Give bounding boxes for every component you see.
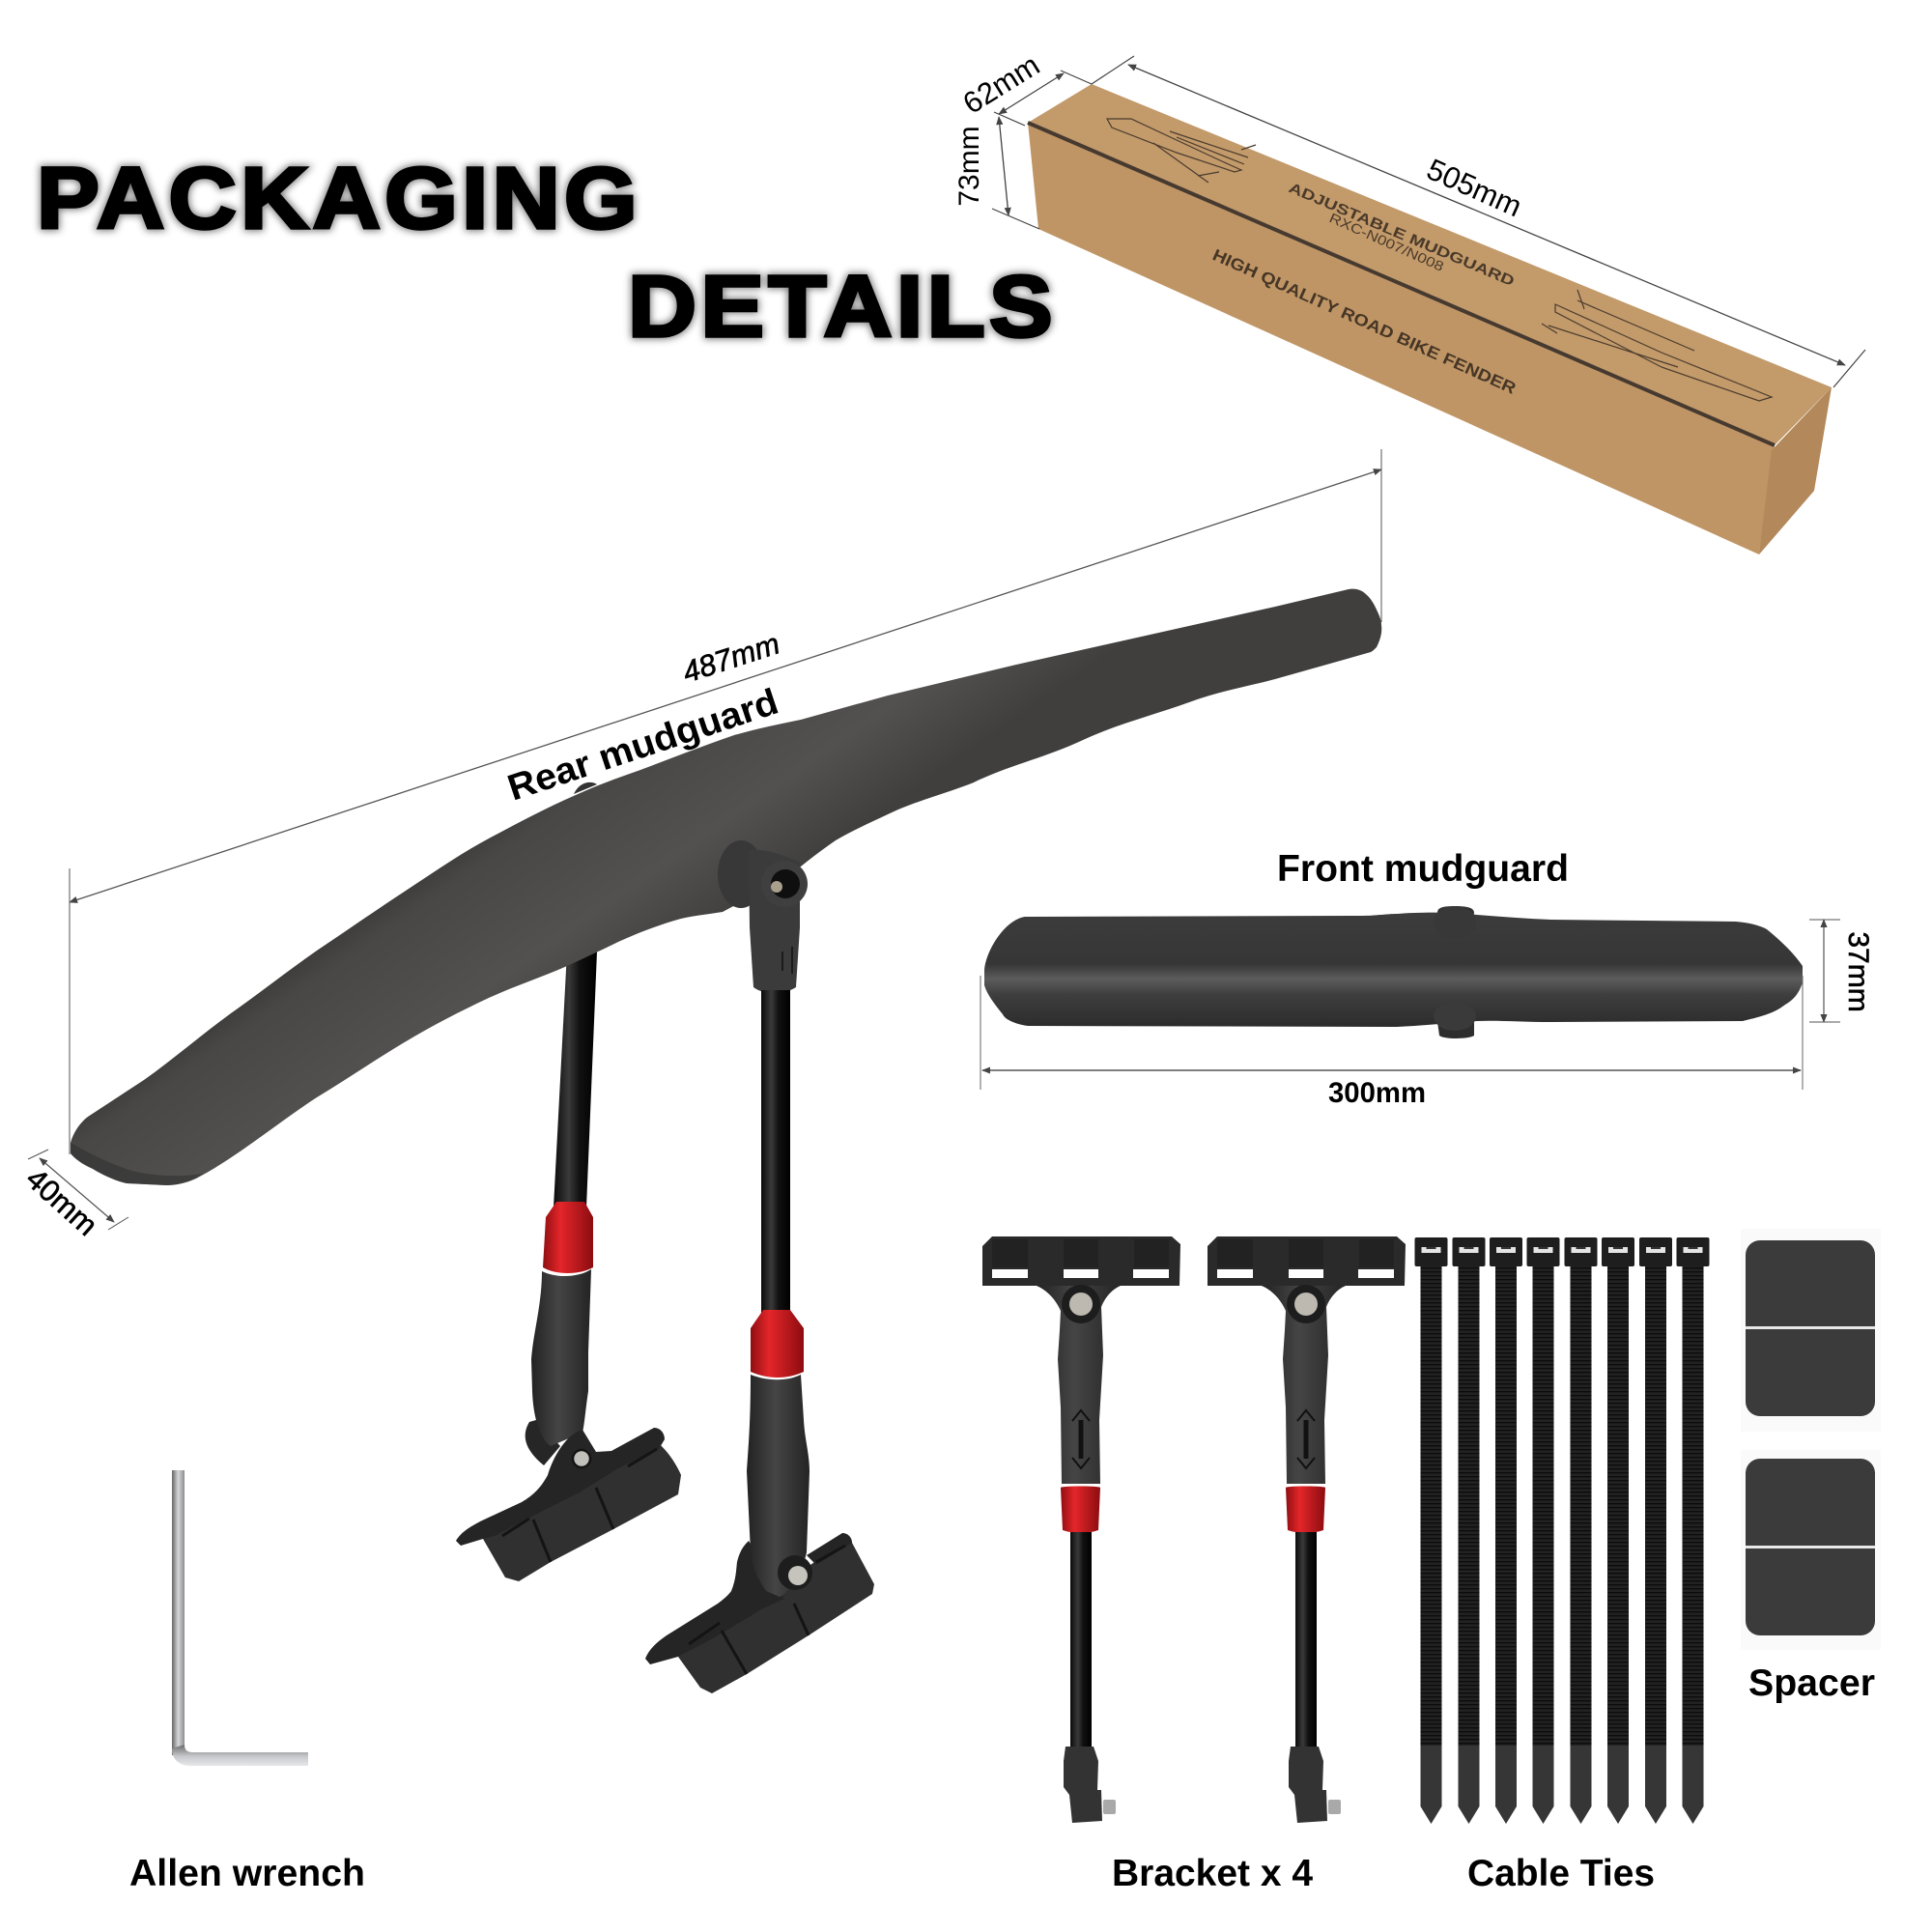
rear strut A lower assembly xyxy=(456,1202,681,1581)
title: PACKAGING: PACKAGING xyxy=(37,151,641,247)
strut B red collar xyxy=(751,1310,804,1378)
strut A foot rollers xyxy=(480,1439,681,1581)
bracket 1 xyxy=(982,1236,1180,1823)
box: sketch of mudguard right xyxy=(1542,290,1772,401)
box: front face xyxy=(1028,123,1775,554)
rear strut B assembly xyxy=(645,990,874,1693)
box text: adjustable mudguard: ADJUSTABLE MUDGUARD xyxy=(1286,180,1517,290)
strut A hub xyxy=(526,1420,560,1465)
dimension: rear width 40mm xyxy=(19,1150,128,1242)
dimension: box width 62mm: 62mm xyxy=(957,47,1045,121)
label: spacer: Spacer xyxy=(1748,1662,1875,1704)
label: bracket x 4: Bracket x 4 xyxy=(1112,1853,1313,1894)
dimension: box length 505mm: 505mm xyxy=(1422,152,1527,223)
box: sketch of mudguard left xyxy=(1107,119,1256,183)
rear mudguard body xyxy=(71,589,1381,1185)
strut B foot ridges xyxy=(689,1546,845,1674)
packaging box xyxy=(1028,84,1832,554)
box text: model number: RXC-N007/N008 xyxy=(1327,210,1446,274)
dimension: box height 73mm: 73mm xyxy=(953,126,985,207)
rear mudguard upper bump xyxy=(574,782,597,794)
dimension: rear length 487mm: 487mm xyxy=(678,626,783,690)
bracket 2 xyxy=(1208,1236,1406,1823)
front mudguard body xyxy=(984,906,1803,1038)
strut B upper rail xyxy=(807,1533,852,1565)
spacer 2 xyxy=(1741,1450,1881,1650)
label: front mudguard: Front mudguard xyxy=(1277,848,1569,890)
strut A handle xyxy=(531,1269,591,1446)
rear strut A upper rod xyxy=(554,952,597,1208)
box text: high quality: HIGH QUALITY ROAD BIKE FENDER xyxy=(1209,245,1519,398)
title: PACKAGING: PACKAGING xyxy=(37,151,641,247)
box: dark seam xyxy=(1028,123,1775,445)
allen wrench xyxy=(172,1470,308,1766)
rear mudguard mount cap xyxy=(718,840,808,993)
strut A foot ridges xyxy=(502,1449,657,1562)
dimension: rear length 487mm xyxy=(70,449,1381,1154)
dimension: box length 505mm xyxy=(1092,56,1865,387)
cable ties xyxy=(1414,1237,1710,1824)
dimension: rear width 40mm: 40mm xyxy=(19,1161,104,1242)
dimension: box height 73mm xyxy=(953,117,1039,229)
strut B rod xyxy=(761,990,790,1314)
dimension: front length 300mm: 300mm xyxy=(1328,1077,1426,1109)
dimension: front width 37mm xyxy=(1809,920,1874,1022)
strut A foot rail xyxy=(456,1428,665,1546)
strut B bolt xyxy=(778,1555,812,1590)
dimension: front width 37mm: 37mm xyxy=(1842,931,1874,1012)
strut A bolt xyxy=(573,1450,590,1467)
label: cable ties: Cable Ties xyxy=(1467,1853,1655,1894)
title: DETAILS: DETAILS xyxy=(628,259,1057,355)
strut B foot rail xyxy=(645,1541,784,1664)
strut B foot rollers xyxy=(678,1543,874,1693)
rear mudguard tip shading xyxy=(71,1143,203,1185)
strut B handle xyxy=(747,1375,810,1597)
label: rear mudguard: Rear mudguard xyxy=(503,682,783,810)
box: top face xyxy=(1028,84,1832,445)
strut A red collar xyxy=(543,1202,593,1273)
spacer 1 xyxy=(1741,1229,1881,1432)
box: end face xyxy=(1759,387,1832,554)
dimension: box width 62mm xyxy=(957,47,1092,126)
label: allen wrench: Allen wrench xyxy=(129,1853,365,1894)
title: DETAILS: DETAILS xyxy=(628,259,1057,355)
